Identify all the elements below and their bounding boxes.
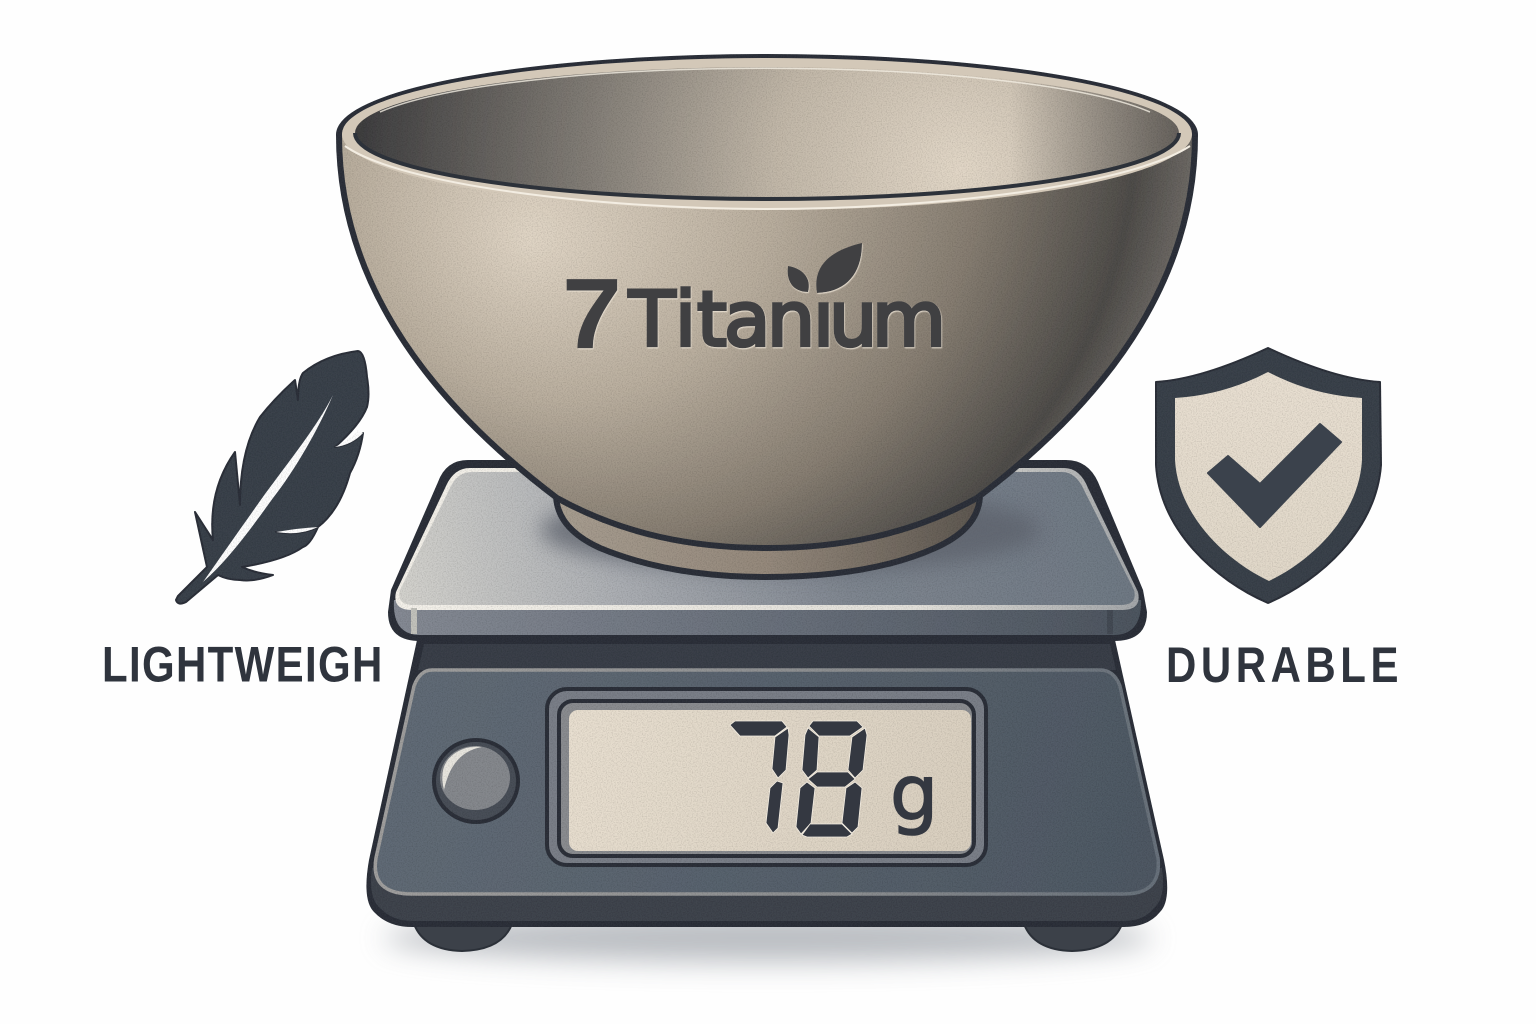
label: durable: DURABLE — [1166, 637, 1403, 693]
logo wordmark: Titanium — [628, 274, 946, 364]
icon: shield with check — [1156, 348, 1381, 603]
scale feet — [414, 924, 1122, 951]
check mark — [1208, 424, 1341, 527]
LCD unit: g — [890, 748, 938, 837]
LCD digit 7 — [730, 721, 789, 833]
bowl interior — [355, 67, 1179, 199]
logo leaves — [788, 243, 862, 293]
scale button — [434, 740, 518, 822]
bowl shadow on plate — [540, 488, 1040, 572]
label: lightweight: LIGHTWEIGH — [102, 636, 384, 692]
display bezel — [547, 689, 986, 865]
bowl body — [339, 57, 1195, 548]
logo numeral: 7 — [562, 258, 622, 370]
scale — [366, 460, 1167, 951]
infographic: titanium bowl on scale — [104, 54, 1397, 978]
scale weighing plate — [388, 460, 1147, 641]
bowl rim — [342, 58, 1192, 210]
bowl — [339, 57, 1195, 577]
scale face — [375, 670, 1158, 894]
bowl logo — [566, 243, 943, 350]
bowl foot — [556, 494, 980, 577]
LCD screen — [569, 710, 971, 851]
icon: feather — [176, 351, 368, 604]
scale base body — [366, 640, 1167, 927]
ground shadow — [383, 914, 1153, 962]
LCD digit 8 — [796, 721, 867, 837]
